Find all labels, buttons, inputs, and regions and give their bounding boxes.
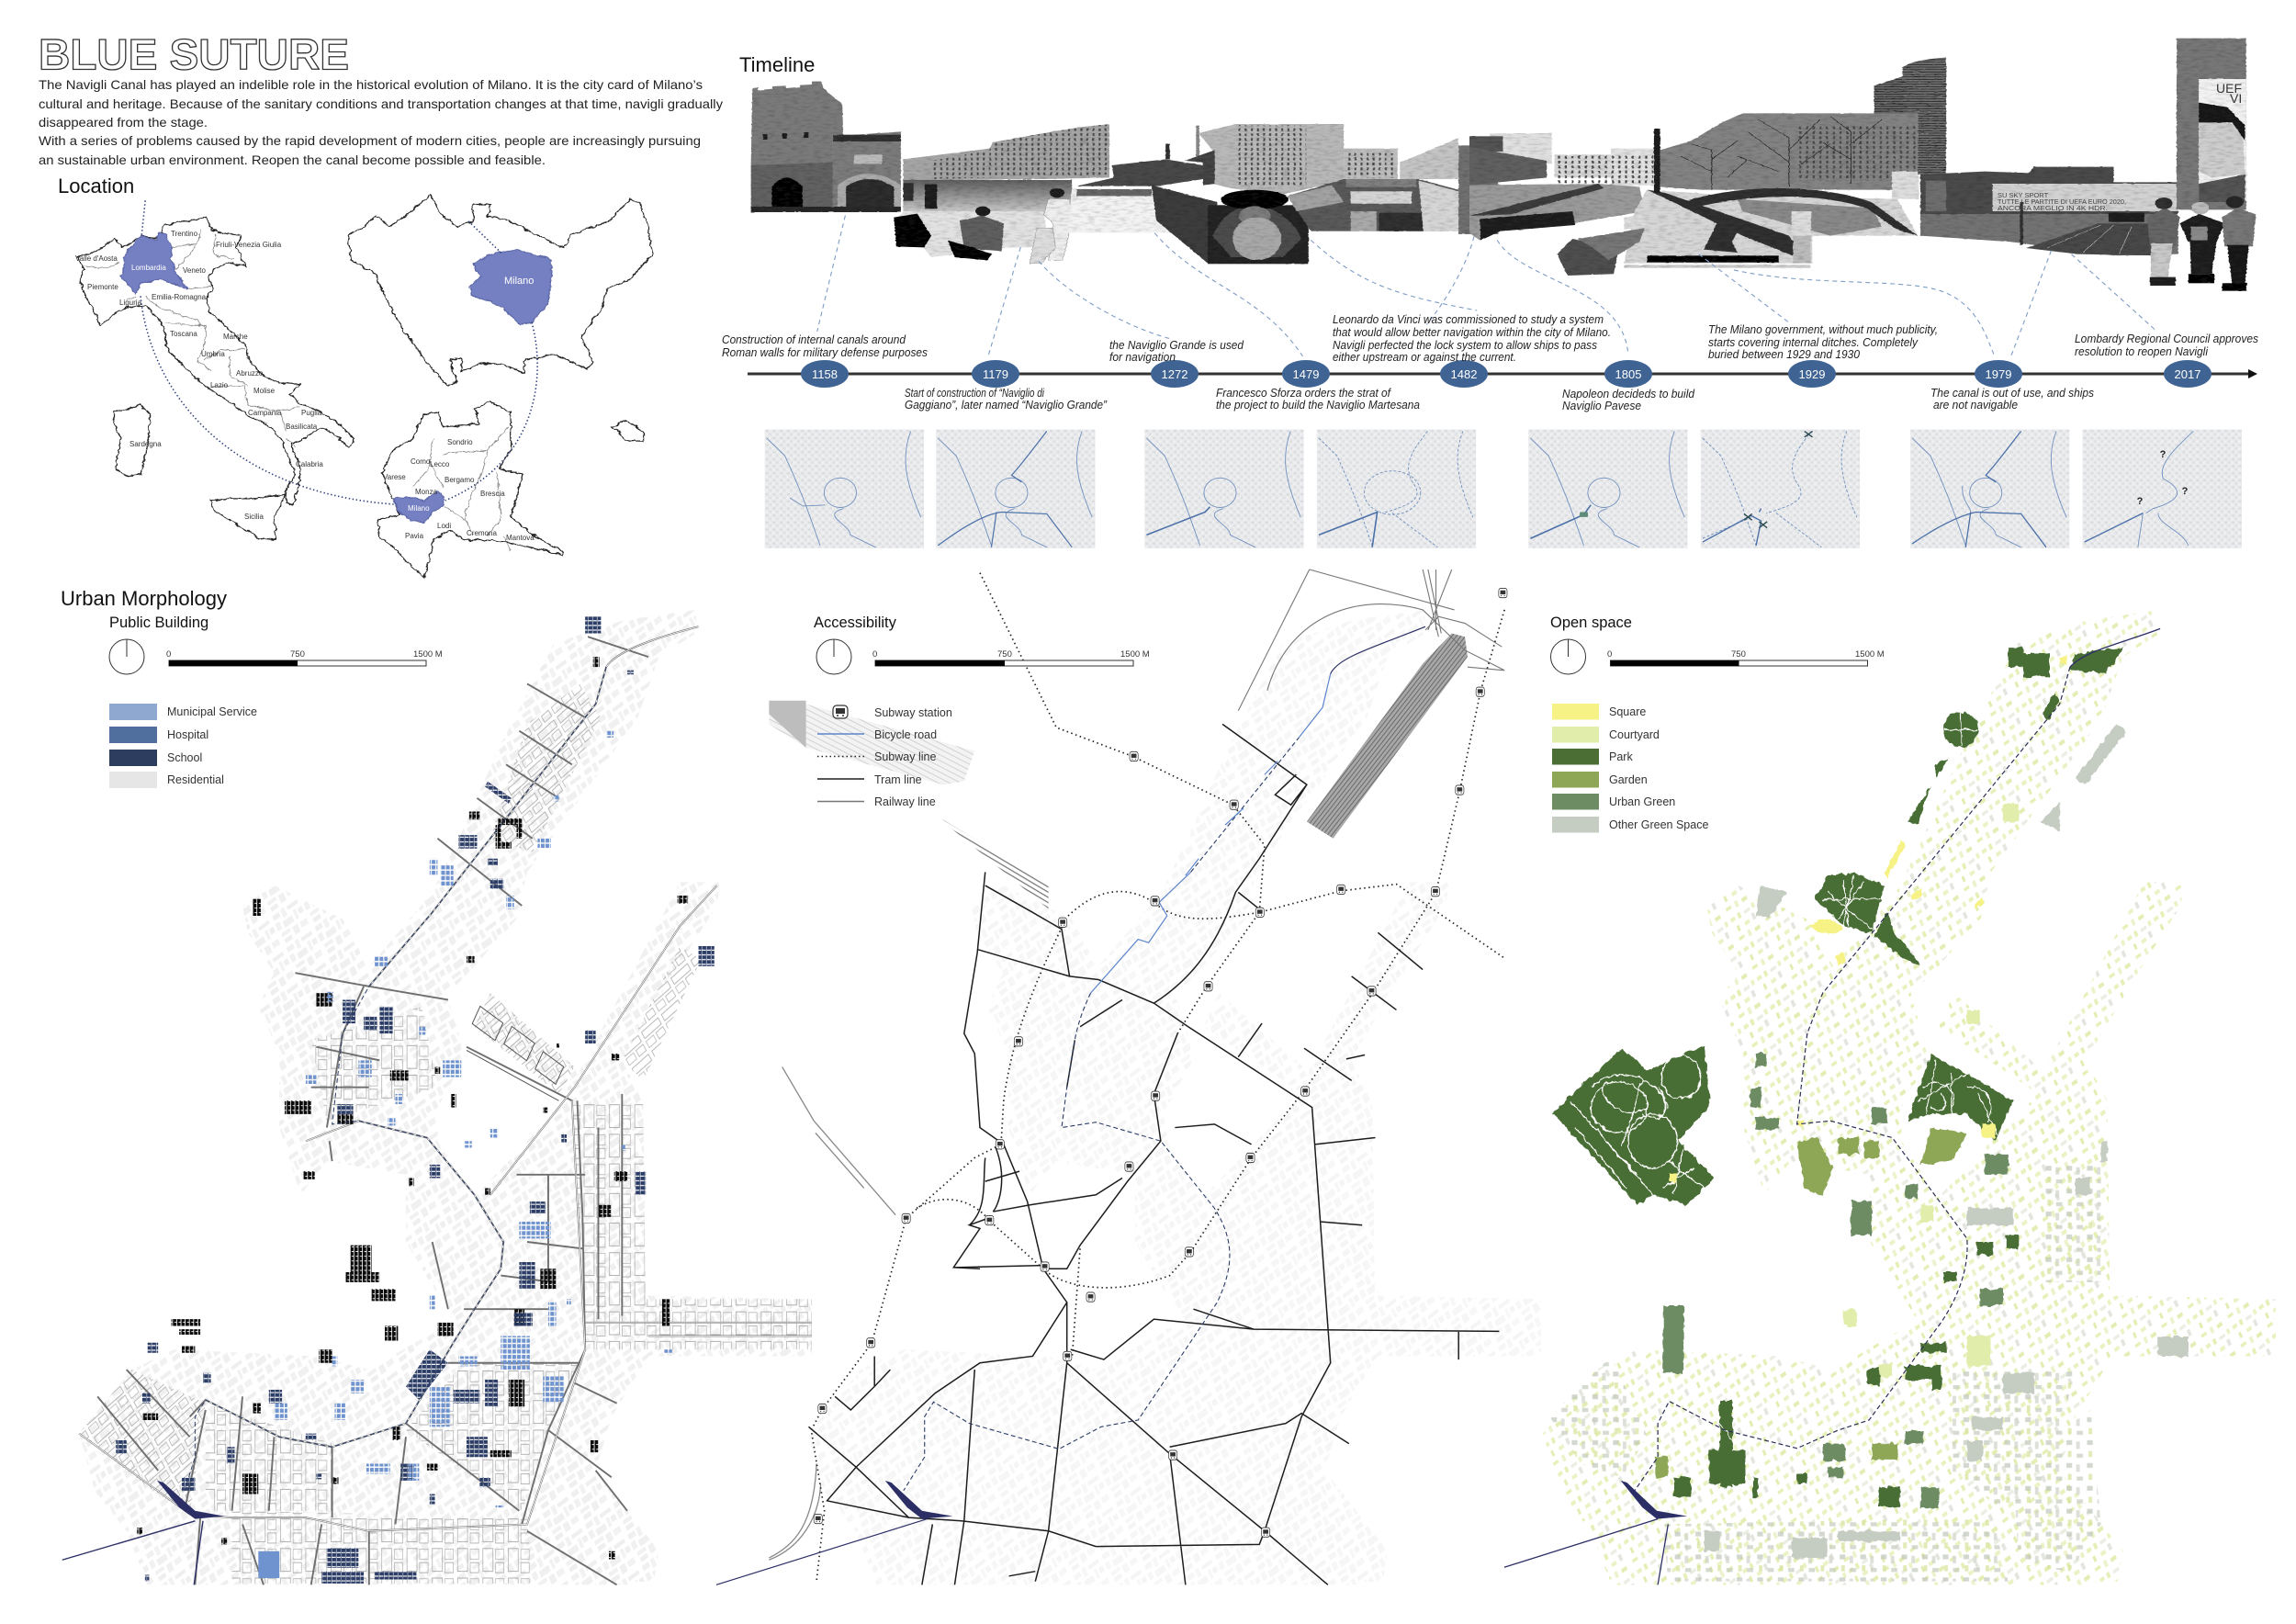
thumbnail: 2017 (2083, 429, 2242, 548)
timeline annotations: the project to build the Naviglio Martesana (1216, 399, 1420, 412)
map labels: Varese (383, 473, 406, 481)
map labels: Sicilia (244, 513, 264, 521)
intro text: cultural and heritage. Because of the sanitary conditions and transportation changes at that time, navigli gradually (39, 96, 723, 111)
photo collage: left (751, 82, 1498, 264)
map labels: Trentino (171, 230, 198, 238)
map labels: Veneto (183, 266, 206, 275)
bicycle road (1091, 673, 1331, 993)
map: Lombardia highlight (121, 232, 187, 294)
timeline annotations: that would allow better navigation within the city of Milano. (1333, 326, 1611, 339)
heading: location: Location (58, 175, 134, 197)
timeline annotations: buried between 1929 and 1930 (1708, 348, 1860, 361)
map labels: Liguria (119, 299, 142, 307)
legend (817, 705, 952, 808)
urban green (1663, 1054, 2009, 1507)
scale bar: 750 (1731, 649, 1746, 660)
intro text: disappeared from the stage. (39, 115, 208, 130)
legend: Municipal Service (167, 705, 257, 718)
map labels: Emilia-Romagna (152, 293, 207, 301)
map labels: Pavia (405, 532, 424, 540)
canal north (1504, 628, 2160, 1585)
legend: Residential (167, 773, 224, 786)
scale bar (166, 649, 443, 666)
scale bar: 0 (1607, 649, 1612, 660)
legend: Bicycle road (874, 728, 937, 741)
map labels: Molise (253, 387, 276, 395)
grey fabric south (1549, 1161, 2101, 1582)
timeline annotations: The canal is out of use, and ships (1930, 387, 2095, 400)
map labels: Abruzzo (236, 369, 264, 378)
intro text: an sustainable urban environment. Reopen the canal become possible and feasible. (39, 152, 546, 167)
map: Lombardy large (348, 195, 652, 386)
squares (1797, 657, 2067, 1138)
map labels: Calabria (296, 460, 323, 468)
intro text: With a series of problems caused by the rapid development of modern cities, people are increasingly pursuing (39, 133, 701, 148)
scale bar (1607, 649, 1885, 666)
heading: urban morphology: Urban Morphology (61, 587, 227, 610)
map: Milano province large (470, 249, 552, 324)
canal basin (885, 1481, 952, 1519)
timeline leader lines (817, 216, 2157, 356)
photo: old canal buildings (1469, 133, 1653, 241)
billboard text: UEF (2216, 81, 2242, 96)
thumbnail: 1272 (1144, 429, 1304, 548)
large park (1552, 1045, 1715, 1205)
timeline year markers: 1929 (1799, 367, 1825, 381)
legend: Courtyard (1609, 728, 1660, 741)
timeline year markers: 1158 (812, 367, 838, 381)
scale bar (872, 649, 1150, 666)
scale bar: 1500 M (413, 649, 443, 660)
timeline year markers: 2017 (2175, 367, 2200, 381)
north arrow (109, 639, 144, 674)
timeline annotations: Construction of internal canals around (722, 333, 906, 346)
map labels (75, 230, 535, 542)
railway yards (769, 634, 1468, 1560)
residential fabric (79, 610, 812, 1585)
canal route (904, 738, 1299, 1491)
timeline annotations: Roman walls for military defense purposes (722, 346, 929, 359)
map shapes (77, 195, 652, 578)
map: accessibility network (716, 570, 1541, 1585)
map labels: Sondrio (447, 438, 473, 446)
north arrow (816, 639, 851, 674)
gardens (1655, 1128, 1967, 1477)
timeline annotations: either upstream or against the current. (1333, 351, 1516, 364)
scale bar: 750 (997, 649, 1012, 660)
thumbnail: 1929 (1701, 429, 1860, 548)
parks (1673, 647, 2124, 1507)
map labels: Mantova (506, 534, 535, 542)
round park (1943, 712, 1978, 747)
legend: Subway station (874, 706, 952, 719)
map: Italy outline (77, 217, 354, 504)
legend: Tram line (874, 773, 922, 786)
legend: Park (1609, 750, 1633, 763)
photo: three men (2147, 196, 2256, 291)
timeline annotations: Navigli perfected the lock system to allow ships to pass (1333, 339, 1598, 352)
photo: towers (1874, 58, 1946, 175)
timeline year markers: 1979 (1986, 367, 2011, 381)
blue buildings (274, 731, 672, 1507)
subway stations (814, 588, 1507, 1537)
solid blue plot (258, 1551, 279, 1578)
timeline axis (748, 369, 2257, 378)
legend (109, 704, 257, 788)
photo: tower gate (751, 82, 901, 212)
map labels: Bergamo (445, 476, 475, 484)
map labels: Valle d'Aosta (75, 254, 118, 263)
tram lines (808, 724, 1499, 1585)
black buildings (137, 657, 688, 1560)
map labels: Piemonte (87, 283, 118, 291)
map labels: Cremona (467, 529, 497, 537)
map labels: Lecco (430, 460, 450, 468)
map: fragment (612, 420, 645, 441)
map labels: Brescia (480, 490, 505, 498)
map labels: Friuli-Venezia Giulia (216, 241, 282, 249)
timeline year markers: 1482 (1451, 367, 1477, 381)
panel: location maps (75, 195, 652, 578)
map: Italy regions (82, 229, 300, 446)
thumbnail: 1179 (936, 429, 1095, 548)
canal north (716, 626, 1425, 1585)
map labels: Basilicata (286, 423, 318, 431)
timeline annotations: Lombardy Regional Council approves (2075, 333, 2259, 345)
timeline year markers (801, 360, 2212, 388)
map labels: Lodi (437, 522, 451, 530)
thumbnail: 1979 (1910, 429, 2069, 548)
scale bar: 750 (290, 649, 305, 660)
canal route (1635, 667, 2070, 1491)
timeline annotations: the Naviglio Grande is used (1109, 339, 1244, 352)
photo: tower billboard (2177, 39, 2246, 209)
timeline year markers: 1805 (1615, 367, 1641, 381)
canal lines (62, 1521, 203, 1585)
billboard text (1998, 81, 2242, 212)
map labels: Lombardia (131, 264, 166, 272)
map labels: Puglia (301, 409, 322, 417)
legend: Railway line (874, 795, 936, 808)
map labels: Toscana (170, 330, 197, 338)
building frames (467, 1006, 564, 1100)
thumbnail: 1479 (1317, 429, 1476, 548)
scale bar: 0 (872, 649, 877, 660)
legend: Subway line (874, 750, 936, 763)
map labels: Lazio (210, 381, 229, 389)
legend: Urban Green (1609, 795, 1675, 808)
map: Sicily (211, 494, 286, 540)
courtyards (1843, 805, 2019, 1376)
photo: water and trees (1067, 126, 1203, 232)
thumbnail question marks: ? (2160, 449, 2167, 460)
canal basin (1621, 1481, 1687, 1519)
photo collage: right (1469, 39, 2256, 291)
subway lines (811, 573, 1504, 1582)
thumbnail question marks: ? (2182, 486, 2189, 497)
timeline thumbnail maps (765, 429, 2242, 548)
region outlines (77, 195, 652, 578)
photo: workers (1557, 211, 1811, 276)
map heading: public building: Public Building (109, 615, 208, 631)
map heading: accessibility: Accessibility (814, 615, 897, 631)
faint city fabric (808, 610, 1541, 1585)
timeline annotations: resolution to reopen Navigli (2075, 345, 2209, 358)
canal route (185, 667, 606, 1491)
railway lines (1238, 570, 1504, 711)
map labels: Milano (504, 276, 534, 287)
map labels: Campania (248, 409, 282, 417)
billboard text: VI (2230, 91, 2242, 106)
panel: accessibility map (716, 570, 1541, 1585)
other green (1705, 724, 2189, 1558)
timeline annotations: are not navigable (1933, 399, 2018, 412)
scale bar: 1500 M (1855, 649, 1885, 660)
map labels: Milano (408, 504, 430, 513)
block outlines (79, 683, 812, 1584)
thumbnail question marks (2137, 449, 2189, 507)
map labels: Umbria (201, 350, 225, 358)
residual green fabric (1543, 610, 2276, 1585)
billboard text: ANCORA MEGLIO IN 4K HDR. (1998, 204, 2108, 212)
map: province borders (412, 427, 511, 551)
photo: canal with painters (894, 124, 1109, 264)
title: BLUE SUTURE (39, 31, 349, 79)
photo: street building (1152, 124, 1344, 264)
map: Lombardy provinces (377, 401, 562, 578)
canal basin (157, 1481, 224, 1519)
navy buildings (116, 616, 715, 1584)
panel: public building map (62, 610, 812, 1585)
map: Sardinia (114, 405, 150, 476)
timeline year markers: 1479 (1293, 367, 1319, 381)
map labels: Marche (223, 333, 248, 341)
timeline annotations: Francesco Sforza orders the strat of (1216, 387, 1391, 400)
panel: open space map (1504, 610, 2276, 1585)
legend: Other Green Space (1609, 818, 1708, 831)
timeline annotations: starts covering internal ditches. Completely (1708, 336, 1919, 349)
legend: Hospital (167, 728, 208, 741)
timeline annotations: Napoleon decideds to build (1562, 388, 1695, 400)
north arrow (1550, 639, 1585, 674)
map: Milano province small (393, 491, 445, 523)
intro text: The Navigli Canal has played an indelible role in the historical evolution of Milano. It is the city card of Milano’s (39, 77, 703, 92)
map labels: Monza (415, 488, 438, 496)
billboard text: TUTTE LE PARTITE DI UEFA EURO 2020, (1998, 197, 2126, 206)
map labels: Sardegna (129, 440, 162, 448)
thumbnail: 1805 (1528, 429, 1688, 548)
timeline annotations: The Milano government, without much publicity, (1708, 323, 1938, 336)
legend: Garden (1609, 773, 1648, 786)
intro text (39, 77, 723, 167)
photo: bridge and trees (1624, 113, 1919, 268)
thumbnail question marks: ? (2137, 496, 2144, 507)
scale bar: 1500 M (1120, 649, 1150, 660)
connector arcs (141, 200, 537, 504)
timeline annotations: Start of construction of “Naviglio di (905, 387, 1045, 400)
map heading: open space: Open space (1550, 615, 1632, 631)
photo: Leonardo portrait (1208, 190, 1309, 264)
photo: lock (1288, 138, 1498, 234)
timeline annotations: Naviglio Pavese (1562, 400, 1641, 412)
timeline year markers: 1272 (1162, 367, 1187, 381)
timeline annotations: for navigation (1109, 351, 1176, 364)
legend: Square (1609, 705, 1646, 718)
timeline annotations (722, 313, 2259, 412)
timeline annotations: Leonardo da Vinci was commissioned to study a system (1333, 313, 1604, 326)
streets (79, 626, 812, 1585)
timeline annotations: Gaggiano”, later named “Naviglio Grande” (905, 399, 1108, 412)
green spaces (1552, 647, 2189, 1558)
map: open space (1504, 610, 2276, 1585)
legend: School (167, 751, 202, 764)
heading: timeline: Timeline (739, 53, 815, 76)
timeline year markers: 1179 (983, 367, 1008, 381)
billboard text: SU SKY SPORT (1998, 191, 2049, 199)
legend (1552, 704, 1708, 832)
map labels: Como (411, 457, 431, 466)
scale bar: 0 (166, 649, 171, 660)
park paths (1715, 712, 1998, 1444)
map: public buildings (62, 610, 812, 1585)
photo: billboard highway (1920, 167, 2178, 255)
thumbnail: 1158 (765, 429, 924, 548)
